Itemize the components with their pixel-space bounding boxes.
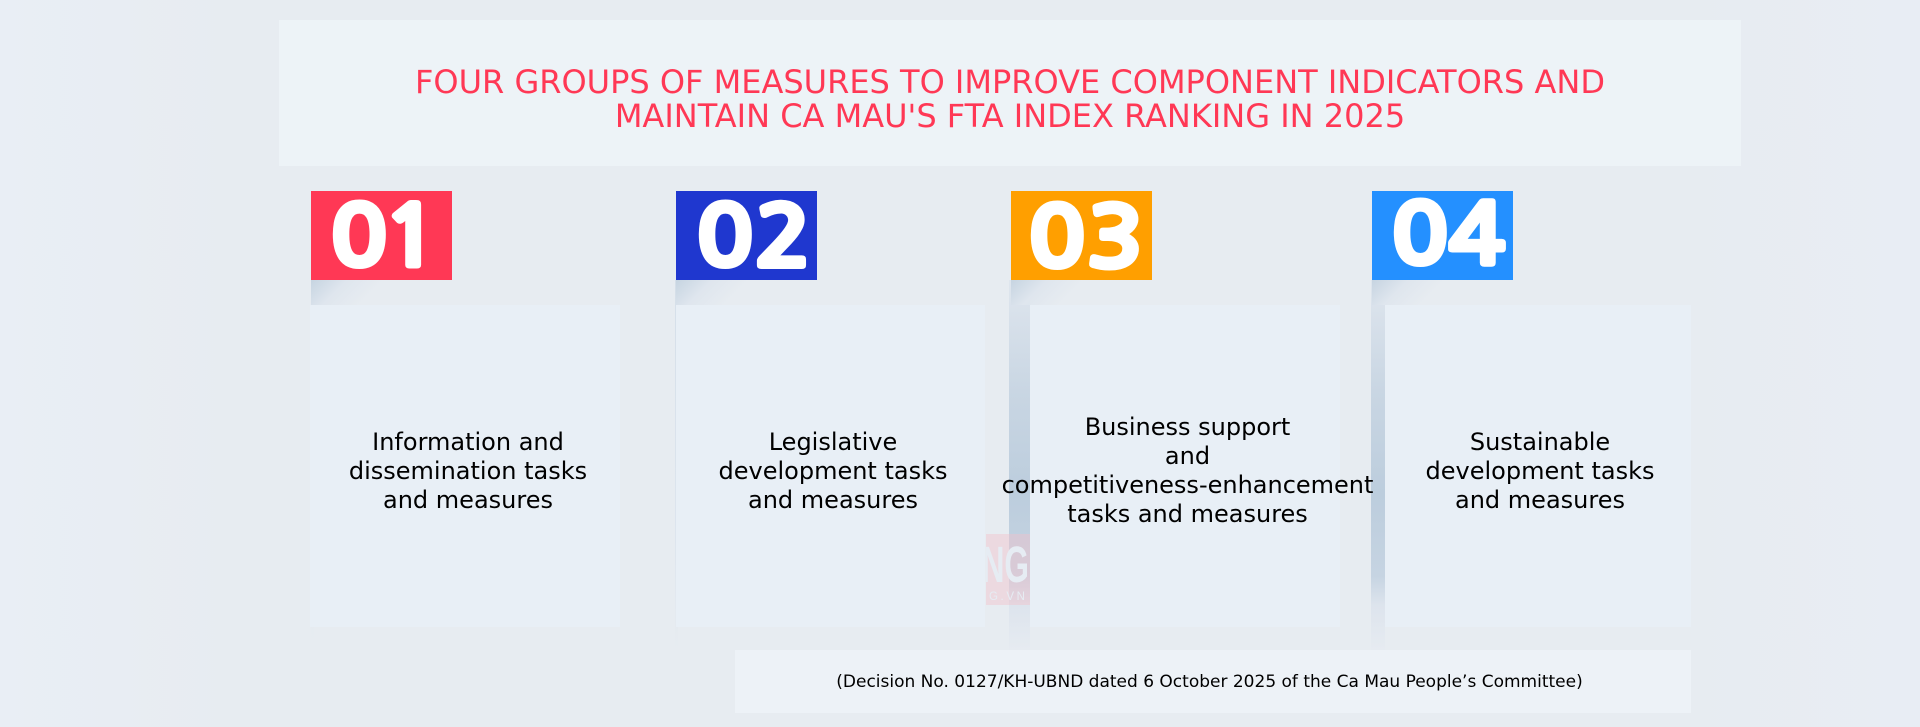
panel: card 3	[1030, 305, 1340, 627]
card 3 text line 2: and	[1165, 442, 1210, 470]
card 2 text line 2: development tasks	[719, 457, 947, 485]
panel: title banner	[279, 20, 1741, 166]
badge: 01	[311, 191, 452, 280]
card 4 text line 3: and measures	[1455, 486, 1625, 514]
badge: 03: 3	[1086, 198, 1144, 280]
heading: line 2: MAINTAIN CA MAU'S FTA INDEX RANKING IN 2025	[615, 97, 1405, 135]
card 3 text line 3: competitiveness-enhancement	[1002, 471, 1373, 499]
badge: 01: 1	[382, 197, 440, 279]
shadow strip: column 1	[311, 280, 314, 645]
panel: card 4	[1385, 305, 1691, 627]
badge: 04: 0	[1391, 195, 1449, 277]
badge shadow: column 1	[311, 280, 391, 305]
shadow strip: column 2	[675, 280, 678, 650]
shadow strip: column 4	[1371, 280, 1385, 650]
card 3 text	[1002, 413, 1373, 528]
panel: source note	[735, 650, 1691, 713]
shadow strip: column 3	[1009, 280, 1030, 650]
card 4 text line 1: Sustainable	[1470, 428, 1610, 456]
card 1 text line 2: dissemination tasks	[349, 457, 587, 485]
badge: 03	[1011, 191, 1152, 280]
badge shadow: column 3	[1011, 280, 1091, 305]
badge: 04: 4	[1448, 195, 1506, 277]
badge: 02: 0	[696, 197, 754, 279]
source note text: (Decision No. 0127/KH-UBND dated 6 October 2025 of the Ca Mau People’s Committee)	[836, 672, 1583, 692]
panel: card 1	[310, 305, 620, 627]
card 4 text line 2: development tasks	[1426, 457, 1654, 485]
badge: 01: 0	[330, 197, 388, 279]
card 1 text line 3: and measures	[383, 486, 553, 514]
card 2 text line 3: and measures	[748, 486, 918, 514]
badge: 02	[676, 191, 817, 280]
card 3 text line 1: Business support	[1085, 413, 1290, 441]
badge: 04	[1372, 191, 1513, 280]
badge: 02: 2	[754, 197, 812, 279]
badge shadow: column 4	[1372, 280, 1452, 305]
card 2 text line 1: Legislative	[769, 428, 897, 456]
badge shadow: column 2	[676, 280, 756, 305]
heading: line 1: FOUR GROUPS OF MEASURES TO IMPROVE COMPONENT INDICATORS AND	[415, 63, 1605, 101]
badge: 03: 0	[1028, 198, 1086, 280]
card 3 text line 4: tasks and measures	[1067, 500, 1308, 528]
watermark: G.VN	[989, 591, 1028, 603]
panel: card 2	[676, 305, 985, 627]
card 1 text line 1: Information and	[372, 428, 564, 456]
